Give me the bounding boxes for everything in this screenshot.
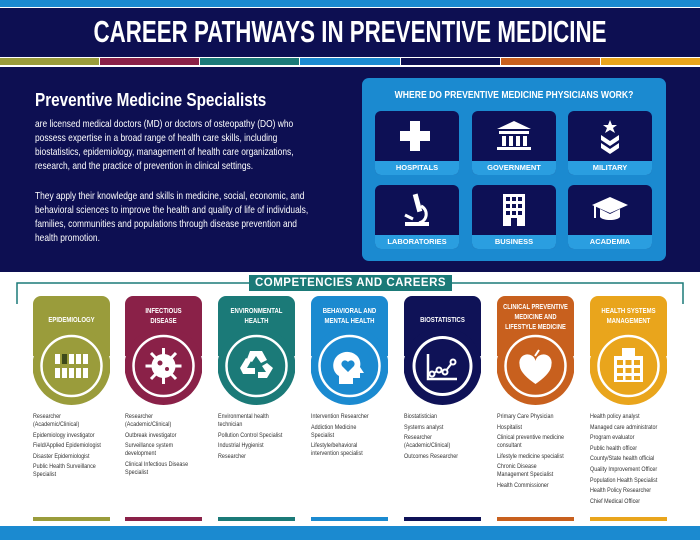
list: behavioral: Specialist: [311, 432, 334, 439]
list: biostatistics: [404, 413, 458, 460]
top strip: [0, 0, 700, 7]
list: behavioral: [311, 413, 369, 457]
tile: laboratories: LABORATORIES: [387, 237, 447, 246]
list: infectious: [125, 413, 188, 476]
list: health systems: Chief Medical Officer: [590, 498, 640, 505]
list: environmental: Environmental health: [218, 413, 269, 420]
card: clinical preventive: CLINICAL PREVENTIVE: [503, 302, 568, 311]
list: health systems: Public health officer: [590, 445, 637, 452]
card: epidemiology: [33, 296, 110, 405]
title: CAREER PATHWAYS IN PREVENTIVE MEDICINE: [93, 14, 607, 49]
list: environmental: technician: [218, 421, 242, 428]
heading: specialists: Preventive Medicine Specialists: [35, 90, 266, 110]
list: epidemiology: [33, 413, 101, 478]
tile: government: [472, 111, 556, 175]
list: behavioral: Addiction Medicine: [311, 424, 356, 431]
list: behavioral: Lifestyle/behavioral: [311, 442, 357, 449]
card: clinical preventive: LIFESTYLE MEDICINE: [505, 322, 566, 331]
panel: where do they work: [362, 78, 666, 261]
list: health systems: County/State health official: [590, 455, 654, 462]
color stripes: [0, 58, 700, 65]
card: environmental health: ENVIRONMENTAL: [231, 306, 282, 315]
intro text: They apply their knowledge and skills in medicine, social, economic, and behavioral sciences to improve the health and quality of life of individuals, families, communities and populations through disease prevention and health promotion.: [35, 190, 308, 244]
list: environmental: Industrial Hygienist: [218, 442, 264, 449]
list: clinical: Lifestyle medicine specialist: [497, 453, 564, 460]
card: behavioral: BEHAVIORAL AND: [323, 306, 376, 315]
list: clinical: Clinical preventive medicine: [497, 434, 564, 441]
list: environmental: Pollution Control Specialist: [218, 432, 282, 439]
tile: government: GOVERNMENT: [487, 163, 541, 172]
list: health systems: Program evaluator: [590, 434, 634, 441]
tile: hospitals: [375, 111, 459, 175]
list: infectious: Specialist: [125, 469, 148, 476]
footer band: [0, 526, 700, 540]
list: clinical: Chronic Disease: [497, 463, 537, 470]
list: biostatistics: Researcher: [404, 434, 432, 441]
list: epidemiology: Public Health Surveillance: [33, 463, 96, 470]
list: health systems: Quality Improvement Officer: [590, 466, 657, 473]
list: epidemiology: Epidemiology investigator: [33, 432, 95, 439]
list: infectious: Outbreak investigator: [125, 432, 176, 439]
card: clinical preventive: MEDICINE AND: [515, 312, 556, 321]
list: clinical: consultant: [497, 442, 522, 449]
card: infectious disease: INFECTIOUS: [145, 306, 182, 315]
list: epidemiology: Field/Applied Epidemiologist: [33, 442, 101, 449]
tile: military: MILITARY: [593, 163, 627, 172]
header band: [0, 8, 700, 57]
tile: military: [568, 111, 652, 175]
intro text: [35, 118, 308, 244]
tile: academia: ACADEMIA: [590, 237, 630, 246]
list: clinical: Management Specialist: [497, 471, 553, 478]
list: epidemiology: (Academic/Clinical): [33, 421, 79, 428]
card: behavioral: [311, 296, 388, 405]
list: infectious: Surveillance system: [125, 442, 173, 449]
section heading: COMPETENCIES AND CAREERS: [255, 277, 446, 289]
list: environmental: Researcher: [218, 453, 246, 460]
card: biostatistics: [404, 296, 481, 405]
card: biostatistics: BIOSTATISTICS: [420, 315, 465, 324]
intro text: are licensed medical doctors (MD) or doctors of osteopathy (DO) who possess expertise in a broad range of health care skills, including biostatistics, epidemiology, management of health care organizations, research, and the practice of prevention in clinical settings.: [35, 118, 294, 172]
card: environmental health: [218, 296, 295, 405]
card: environmental health: HEALTH: [245, 316, 268, 325]
tile: academia: [568, 185, 652, 249]
card: infectious disease: DISEASE: [150, 316, 177, 325]
tile: business: BUSINESS: [495, 237, 533, 246]
list: behavioral: intervention specialist: [311, 450, 363, 457]
bottom color bars: [33, 517, 667, 521]
list: biostatistics: Systems analyst: [404, 424, 443, 431]
list: epidemiology: Disaster Epidemiologist: [33, 453, 90, 460]
tile: hospitals: HOSPITALS: [396, 163, 438, 172]
card: infectious disease: [125, 296, 202, 405]
card: clinical preventive: [497, 296, 574, 405]
list: epidemiology: Specialist: [33, 471, 56, 478]
list: health systems: Health Policy Researcher: [590, 487, 651, 494]
list: behavioral: Intervention Researcher: [311, 413, 369, 420]
list: health systems: Managed care administrator: [590, 424, 657, 431]
tile: business: [472, 185, 556, 249]
list: clinical: [497, 413, 564, 489]
list: biostatistics: Biostatistician: [404, 413, 437, 420]
card: epidemiology: EPIDEMIOLOGY: [48, 315, 95, 324]
list: epidemiology: Researcher: [33, 413, 61, 420]
list: health systems: Health policy analyst: [590, 413, 640, 420]
list: health systems: [590, 413, 658, 505]
list: biostatistics: (Academic/Clinical): [404, 442, 450, 449]
list: infectious: (Academic/Clinical): [125, 421, 171, 428]
card: behavioral: MENTAL HEALTH: [324, 316, 374, 325]
list: clinical: Hospitalist: [497, 424, 522, 431]
list: health systems: Population Health Specialist: [590, 477, 657, 484]
panel heading: WHERE DO PREVENTIVE MEDICINE PHYSICIANS WORK?: [395, 89, 633, 101]
list: infectious: Clinical Infectious Disease: [125, 461, 188, 468]
card: health systems: HEALTH SYSTEMS: [601, 306, 656, 315]
card: health systems: [590, 296, 667, 405]
list: infectious: Researcher: [125, 413, 153, 420]
list: environmental: [218, 413, 282, 460]
list: clinical: Health Commissioner: [497, 482, 549, 489]
list: biostatistics: Outcomes Researcher: [404, 453, 458, 460]
intro navy band: [0, 67, 700, 272]
card: health systems: MANAGEMENT: [607, 316, 650, 325]
list: clinical: Primary Care Physician: [497, 413, 553, 420]
list: infectious: development: [125, 450, 156, 457]
tile: laboratories: [375, 185, 459, 249]
frame lines: [16, 282, 684, 304]
